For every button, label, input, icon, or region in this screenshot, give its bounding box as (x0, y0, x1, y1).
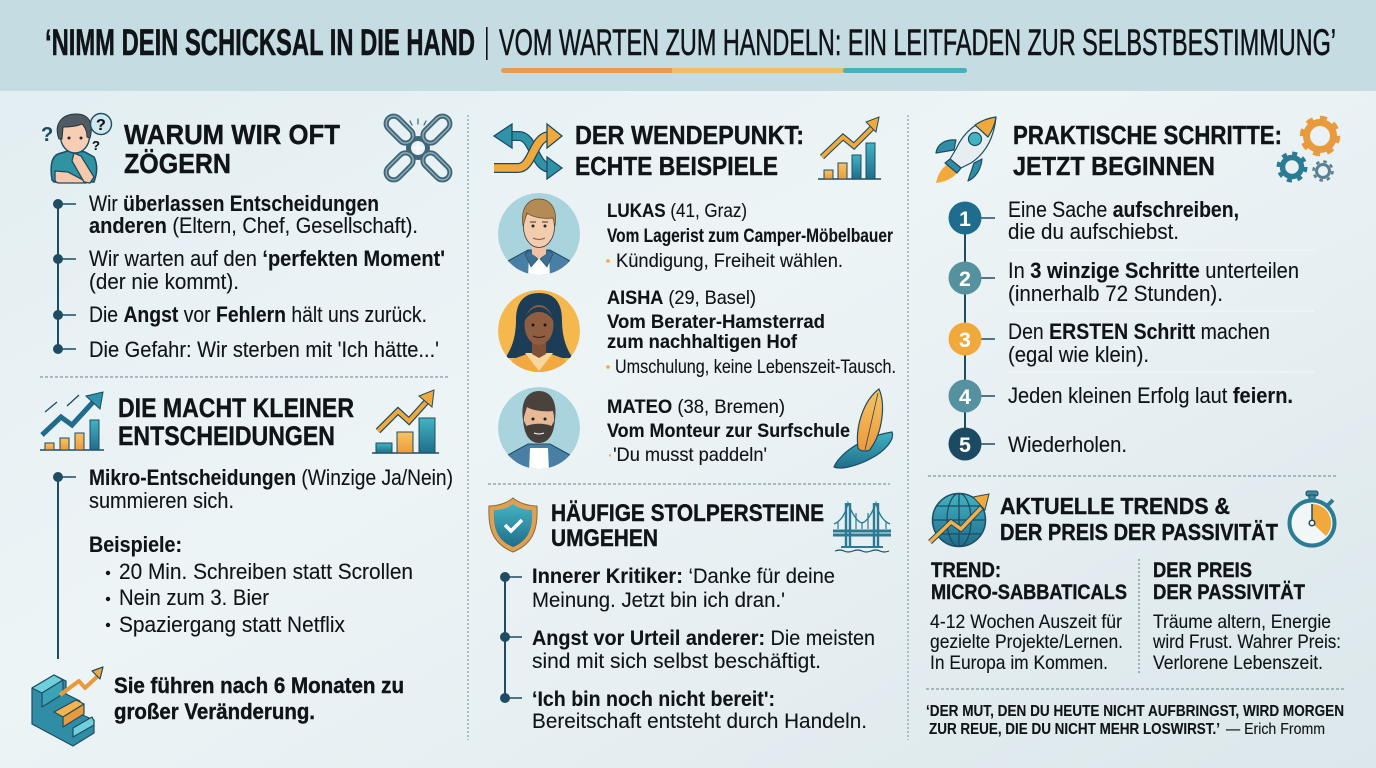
avatar: Mateo (498, 387, 580, 472)
icon: stairs with arrow (32, 667, 103, 746)
numbered timeline: 1 (959, 208, 971, 231)
text block: reasons: Die Gefahr: Wir sterben mit 'Ich hätte...' (89, 337, 439, 362)
text block: Mateo: ·'Du musst paddeln' (607, 444, 767, 466)
icon: crossing arrows (494, 124, 562, 179)
text block: stumbling blocks (532, 564, 875, 733)
text block: stumbling blocks: Meinung. Jetzt bin ich dran.' (532, 588, 785, 612)
column: price of passivity: DER PASSIVITÄT (1153, 580, 1305, 604)
text block: Mateo: Vom Monteur zur Surfschule (607, 420, 850, 442)
heading: ENTSCHEIDUNGEN (118, 421, 335, 451)
text block: steps: (egal wie klein). (1008, 342, 1149, 367)
icon: gears (1278, 118, 1338, 180)
text block: stumbling blocks: sind mit sich selbst beschäftigt. (532, 649, 821, 673)
avatar: Lukas (498, 193, 580, 278)
icon: stopwatch (1290, 491, 1334, 546)
column: trend: gezielte Projekte/Lernen. (930, 631, 1123, 653)
text block: reasons: Die Angst vor Fehlern hält uns zurück. (89, 302, 427, 327)
icon: thinking person: ? (96, 117, 106, 134)
text block: steps: Wiederholen. (1008, 432, 1127, 457)
heading (124, 119, 340, 179)
heading: ZÖGERN (124, 148, 231, 179)
column: trend: In Europa im Kommen. (930, 652, 1108, 674)
text block: steps: Jeden kleinen Erfolg laut feiern. (1008, 383, 1293, 408)
panel: aktuelle trends (926, 491, 1344, 738)
text block: Aisha: AISHA (29, Basel) (607, 287, 756, 309)
header band (0, 0, 1376, 91)
heading: DER PREIS DER PASSIVITÄT (1000, 519, 1279, 545)
title (45, 22, 1336, 63)
heading: JETZT BEGINNEN (1013, 151, 1215, 181)
icon: thinking person (41, 114, 112, 183)
column: trend: 4-12 Wochen Auszeit für (930, 611, 1122, 633)
column: price of passivity: Träume altern, Energie (1153, 611, 1331, 633)
text block: micro decisions: summieren sich. (89, 488, 234, 513)
text block: micro decisions (89, 465, 453, 637)
icon: rocket (936, 117, 996, 183)
column: trend (930, 558, 1127, 674)
timeline (54, 472, 76, 659)
icon: broken chain (383, 113, 453, 183)
heading: PRAKTISCHE SCHRITTE: (1013, 120, 1282, 150)
avatar: Aisha (498, 290, 580, 373)
text block: micro decisions: 20 Min. Schreiben statt Scrollen (119, 559, 413, 584)
text block: steps: In 3 winzige Schritte unterteilen (1008, 258, 1299, 283)
icon: surfboard (834, 389, 892, 468)
text block: reasons: (der nie kommt). (89, 269, 239, 294)
text block: Aisha: zum nachhaltigen Hof (607, 331, 797, 353)
heading: DIE MACHT KLEINER (118, 393, 354, 423)
column: price of passivity (1152, 558, 1341, 674)
icon: growth chart (818, 117, 881, 179)
text block: reasons (89, 191, 445, 362)
callout: großer Veränderung. (114, 699, 315, 724)
heading (1000, 493, 1279, 545)
callout (114, 673, 404, 724)
text block: steps (1008, 197, 1299, 457)
text block: stumbling blocks: Innerer Kritiker: ‘Danke für deine (532, 564, 835, 588)
heading (118, 393, 354, 451)
text block: Lukas: LUKAS (41, Graz) (607, 200, 747, 222)
icon: thinking person: ? (41, 124, 53, 146)
text block: micro decisions: Mikro-Entscheidungen (Winzige Ja/Nein) (89, 465, 453, 490)
panel: praktische schritte (936, 117, 1338, 460)
heading: DER WENDEPUNKT: (575, 122, 804, 150)
text block: stumbling blocks: Angst vor Urteil anderer: Die meisten (532, 626, 875, 650)
icon: globe with arrow (930, 494, 989, 546)
title underline (501, 68, 967, 73)
column: trend: MICRO-SABBATICALS (931, 580, 1127, 604)
text block: stumbling blocks: Bereitschaft entsteht durch Handeln. (532, 709, 867, 733)
panel: haeufige stolpersteine (489, 498, 891, 733)
text block: Lukas: Kündigung, Freiheit wählen. (616, 250, 843, 272)
text block: micro decisions: Nein zum 3. Bier (119, 585, 269, 610)
text block: Aisha: Umschulung, keine Lebenszeit-Tausch. (615, 356, 896, 378)
text block: Mateo (607, 396, 850, 466)
callout: Sie führen nach 6 Monaten zu (114, 673, 404, 698)
heading (575, 122, 804, 181)
heading: UMGEHEN (551, 525, 658, 552)
numbered timeline: 5 (959, 434, 971, 457)
text block: Aisha (606, 287, 896, 378)
quote: ZUR REUE, DIE DU NICHT MEHR LOSWIRST.’ (929, 721, 1220, 738)
column: price of passivity: Verlorene Lebenszeit. (1153, 652, 1323, 674)
heading (1013, 120, 1282, 181)
panel: der wendepunkt (494, 117, 896, 472)
icon: growth chart left (40, 392, 104, 450)
text block: reasons: Wir warten auf den ‘perfekten Moment' (89, 246, 445, 271)
numbered timeline: 3 (959, 329, 971, 352)
timeline (54, 200, 76, 354)
icon: thinking person: ? (92, 138, 100, 153)
icon: bridge (833, 503, 891, 552)
quote (926, 703, 1344, 738)
icon: growth chart right (372, 390, 439, 453)
text block: steps: Den ERSTEN Schritt machen (1008, 319, 1270, 344)
text block: reasons: anderen (Eltern, Chef, Gesellschaft). (89, 213, 418, 238)
numbered timeline: 2 (959, 268, 971, 291)
timeline (500, 572, 522, 702)
text block: Lukas: Vom Lagerist zum Camper-Möbelbauer (607, 225, 893, 247)
column: price of passivity: wird Frust. Wahrer Preis: (1152, 631, 1341, 653)
text block: reasons: Wir überlassen Entscheidungen (89, 191, 379, 216)
heading: HÄUFIGE STOLPERSTEINE (551, 500, 824, 527)
heading (551, 500, 824, 552)
numbered timeline (948, 202, 995, 460)
text block: stumbling blocks: ‘Ich bin noch nicht bereit': (532, 687, 775, 711)
icon: shield with check (489, 498, 537, 552)
text block: Aisha: Vom Berater-Hamsterrad (607, 311, 825, 333)
text block: micro decisions: Spaziergang statt Netflix (119, 612, 345, 637)
heading: AKTUELLE TRENDS & (1000, 493, 1230, 519)
text block: steps: (innerhalb 72 Stunden). (1008, 281, 1223, 306)
text block: steps: Eine Sache aufschreiben, (1008, 197, 1239, 222)
panel: die macht kleiner entscheidungen (32, 390, 453, 746)
column: trend: TREND: (931, 558, 1001, 582)
column: price of passivity: DER PREIS (1153, 558, 1252, 582)
panel: warum wir oft zoegern (41, 113, 453, 362)
text block: micro decisions: Beispiele: (89, 532, 182, 557)
text block: steps: die du aufschiebst. (1008, 219, 1179, 244)
text block: Lukas (606, 200, 893, 272)
text block: Mateo: MATEO (38, Bremen) (607, 396, 785, 418)
heading: WARUM WIR OFT (124, 119, 340, 150)
numbered timeline: 4 (959, 386, 971, 409)
title: ‘NIMM DEIN SCHICKSAL IN DIE HAND (45, 22, 475, 63)
heading: ECHTE BEISPIELE (575, 153, 778, 181)
quote: — Erich Fromm (1226, 721, 1325, 738)
